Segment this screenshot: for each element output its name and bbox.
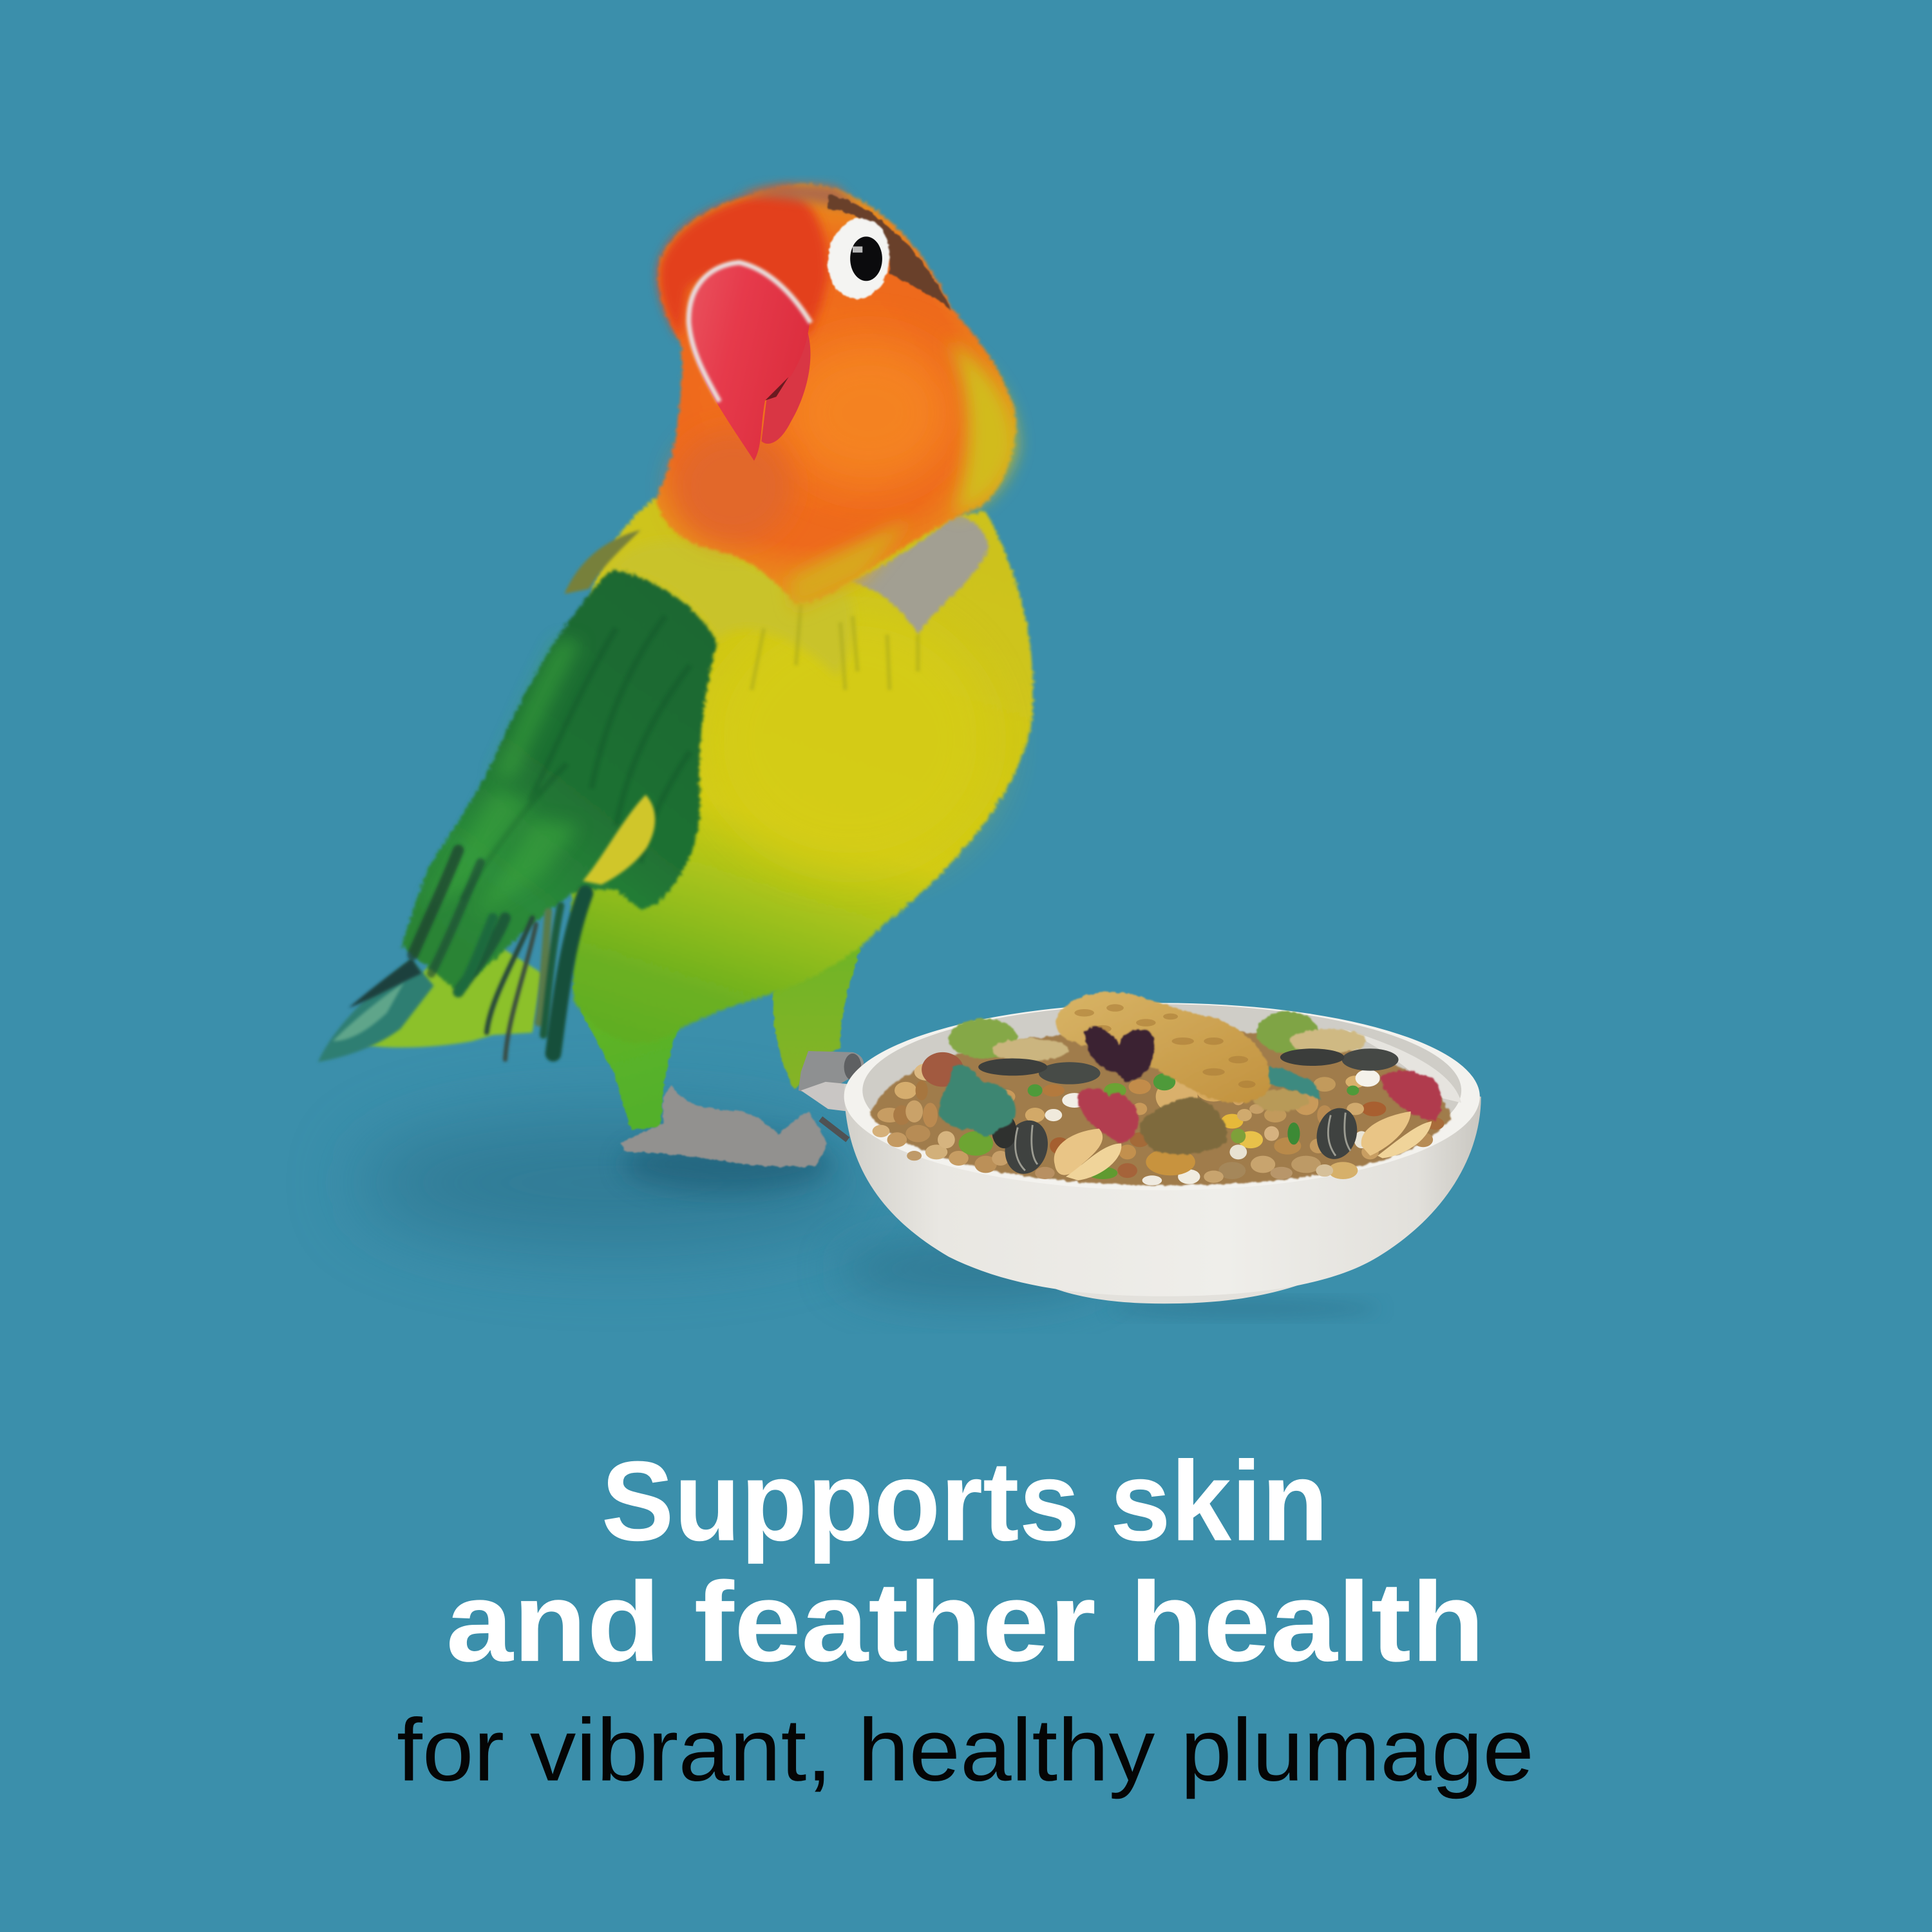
wing highlights [425,641,582,918]
dried berry [1084,1027,1154,1082]
parrot [318,184,1033,1167]
foot and ring [621,1051,864,1167]
beak rim [688,263,811,402]
lower mandible [761,330,810,444]
grey throat patch [850,515,988,634]
bowl [844,992,1481,1303]
wing [402,569,717,992]
ground shadows [357,1115,1380,1317]
headline [446,1439,1484,1685]
tan crackers [992,1029,1367,1112]
cheek orange glow [782,339,955,487]
tail feathers [318,931,542,1062]
shoulder ruff [604,541,853,677]
leg ring [799,1051,864,1097]
headline: Supports skin [601,1439,1328,1565]
upper beak [688,261,810,461]
small grains [873,1052,1444,1186]
peanut [1056,992,1271,1103]
bowl inner [862,1004,1461,1177]
teal star pellets [939,1065,1321,1136]
green pellets [949,1012,1318,1058]
yellow belly glow [708,610,992,869]
dark primary feathers [413,850,585,1059]
left thigh [573,973,680,1130]
head [656,184,1016,604]
ring opening [844,1054,861,1081]
headline: and feather health [446,1559,1484,1685]
olive rock [1140,1097,1227,1154]
subheading: for vibrant, healthy plumage [397,1701,1534,1800]
seed mix [870,992,1450,1186]
ankle [801,1082,850,1112]
grey foot [621,1084,827,1167]
seed base [870,1029,1450,1186]
brown crown [828,194,951,310]
bowl rim [844,1003,1480,1190]
dark sunflower seeds [978,1048,1399,1179]
wing yellow patch [583,795,655,885]
almond pieces [1054,1112,1432,1180]
beak gape [765,377,788,401]
forehead red [658,187,828,339]
body [572,499,1033,1043]
bowl back inner highlight [1343,1029,1461,1103]
right leg [773,943,862,1089]
icon: eye [822,214,895,303]
red heart pellets [1078,1071,1441,1144]
bowl base [1016,1269,1337,1303]
yellow cheek edge [949,339,1016,515]
wing feather detail [462,616,690,900]
toe claw [820,1119,848,1140]
dark shoulder back [564,530,641,594]
bowl body [844,1084,1481,1296]
beak [688,261,811,461]
breast feathers [752,604,918,690]
crown shade [739,184,862,212]
yellow neck fringe [788,518,912,610]
neck orange [674,431,792,542]
